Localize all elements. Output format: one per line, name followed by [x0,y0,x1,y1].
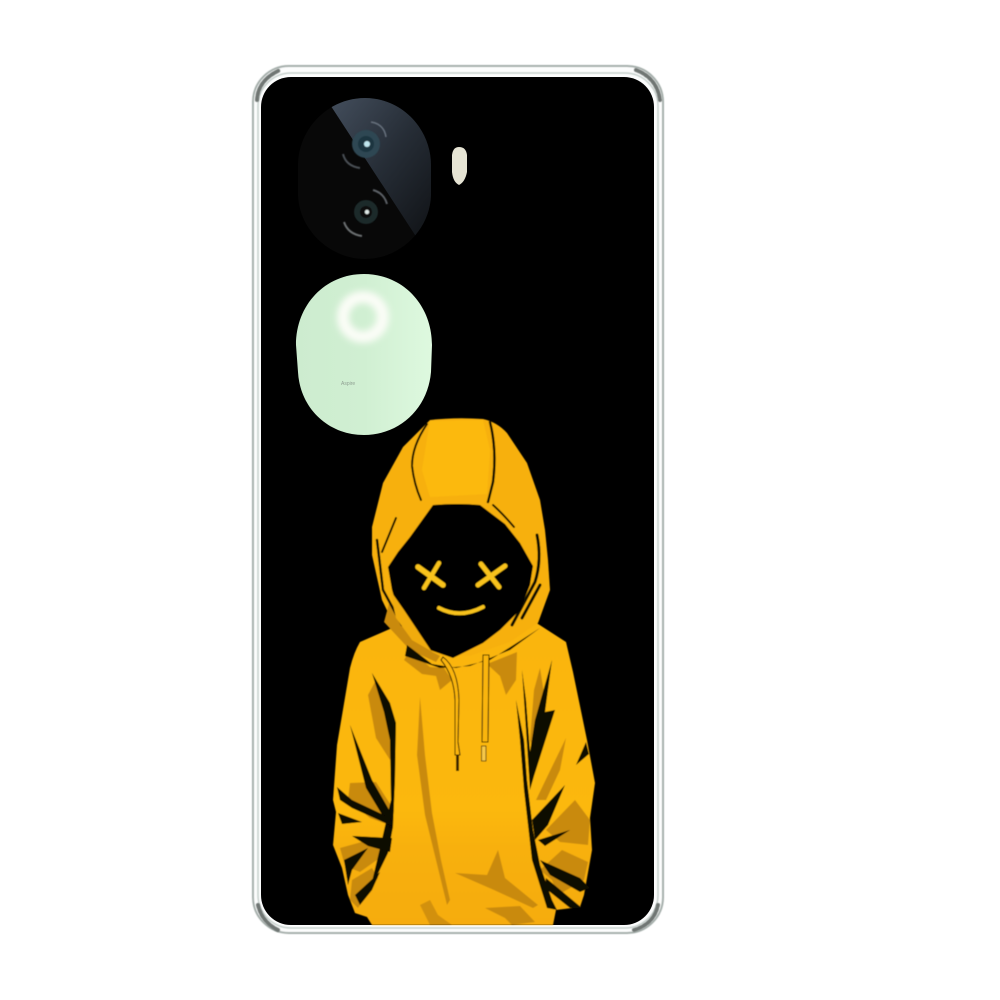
case corner bumpers [257,70,660,930]
smile [439,607,483,613]
diagonal glass reflection [332,98,431,235]
flash [452,147,467,185]
hood rim highlights [390,590,440,656]
camera module [332,98,431,238]
green logo disc [296,274,432,435]
upper lens [343,122,386,168]
face opening [388,504,533,658]
phone case product image [252,64,664,934]
black back printed panel [261,77,654,925]
black fold strokes [337,628,590,910]
eye X right [478,564,505,587]
glowing ring [343,297,383,337]
hood [372,418,550,656]
lower lens [344,190,387,236]
drawstrings [441,655,489,771]
hoodie shading patches [340,600,590,925]
eye X left [418,563,443,588]
clear case outer frame [253,66,663,933]
hoodie body and sleeves [333,622,595,925]
hooded figure [333,418,595,925]
tiny label: Aspire [341,381,355,387]
hood centre panel [422,420,490,497]
hood fold lines [377,422,540,625]
